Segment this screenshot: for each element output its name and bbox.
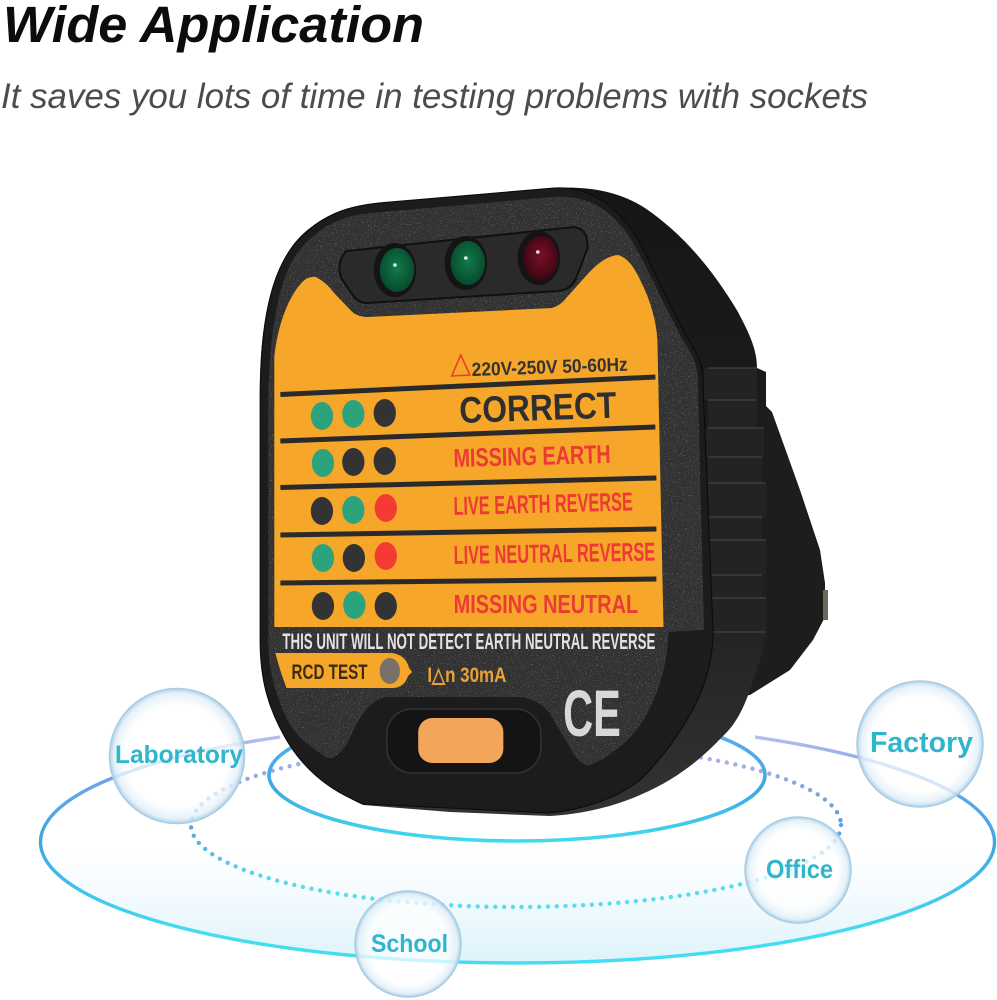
device front scaled group [260,188,713,813]
subtitle: It saves you lots of time in testing problems with sockets [1,77,868,116]
RCD test pill [275,653,412,688]
row: live neutral reverse [312,537,655,572]
plug back [700,395,825,700]
row: missing neutral [312,589,638,620]
outer ring fill [38,721,992,963]
warning note: THIS UNIT WILL NOT DETECT EARTH NEUTRAL REVERSE [282,629,655,654]
bubble: Factory [857,681,983,807]
CE mark: CE [563,677,621,751]
bubble: Factory: Factory [870,727,973,759]
dotted ring [191,743,841,907]
row: missing earth: MISSING EARTH [453,439,611,473]
bubble: Office [745,817,851,923]
socket tester device [260,188,828,816]
bubble: Laboratory: Laboratory [115,741,243,769]
inner ring [269,709,765,841]
bubble: Office: Office [766,854,833,884]
test button recess [326,697,597,792]
side ribs [704,368,766,632]
panel divider lines [280,377,656,583]
orange label panel [274,255,663,627]
row: correct: CORRECT [459,384,617,431]
LED green 1 [374,243,416,297]
LED green 2 [445,236,487,290]
row: missing neutral: MISSING NEUTRAL [454,589,638,619]
RCD test pill: RCD TEST [292,661,368,684]
bubble: Laboratory [110,688,244,824]
background signal columns [155,462,851,768]
row: correct [311,384,617,431]
bubble: School [355,891,461,997]
plug pin nub [823,590,828,620]
row: live earth reverse: LIVE EARTH REVERSE [453,487,633,521]
LED recess [340,227,588,303]
front face rim [260,188,713,813]
front face textured plate [268,197,704,766]
test button [418,718,503,763]
test button slot [387,709,541,773]
row: live earth reverse [311,487,633,525]
voltage warning: 220V-250V 50-60Hz [471,355,628,381]
LED red [518,231,560,285]
body side [260,188,766,816]
row: live neutral reverse: LIVE NEUTRAL REVERSE [453,537,655,570]
bubble: School: School [371,930,448,958]
row: missing earth [312,439,611,477]
outer ring [40,737,994,963]
rated current: I△n 30mA [427,664,506,687]
